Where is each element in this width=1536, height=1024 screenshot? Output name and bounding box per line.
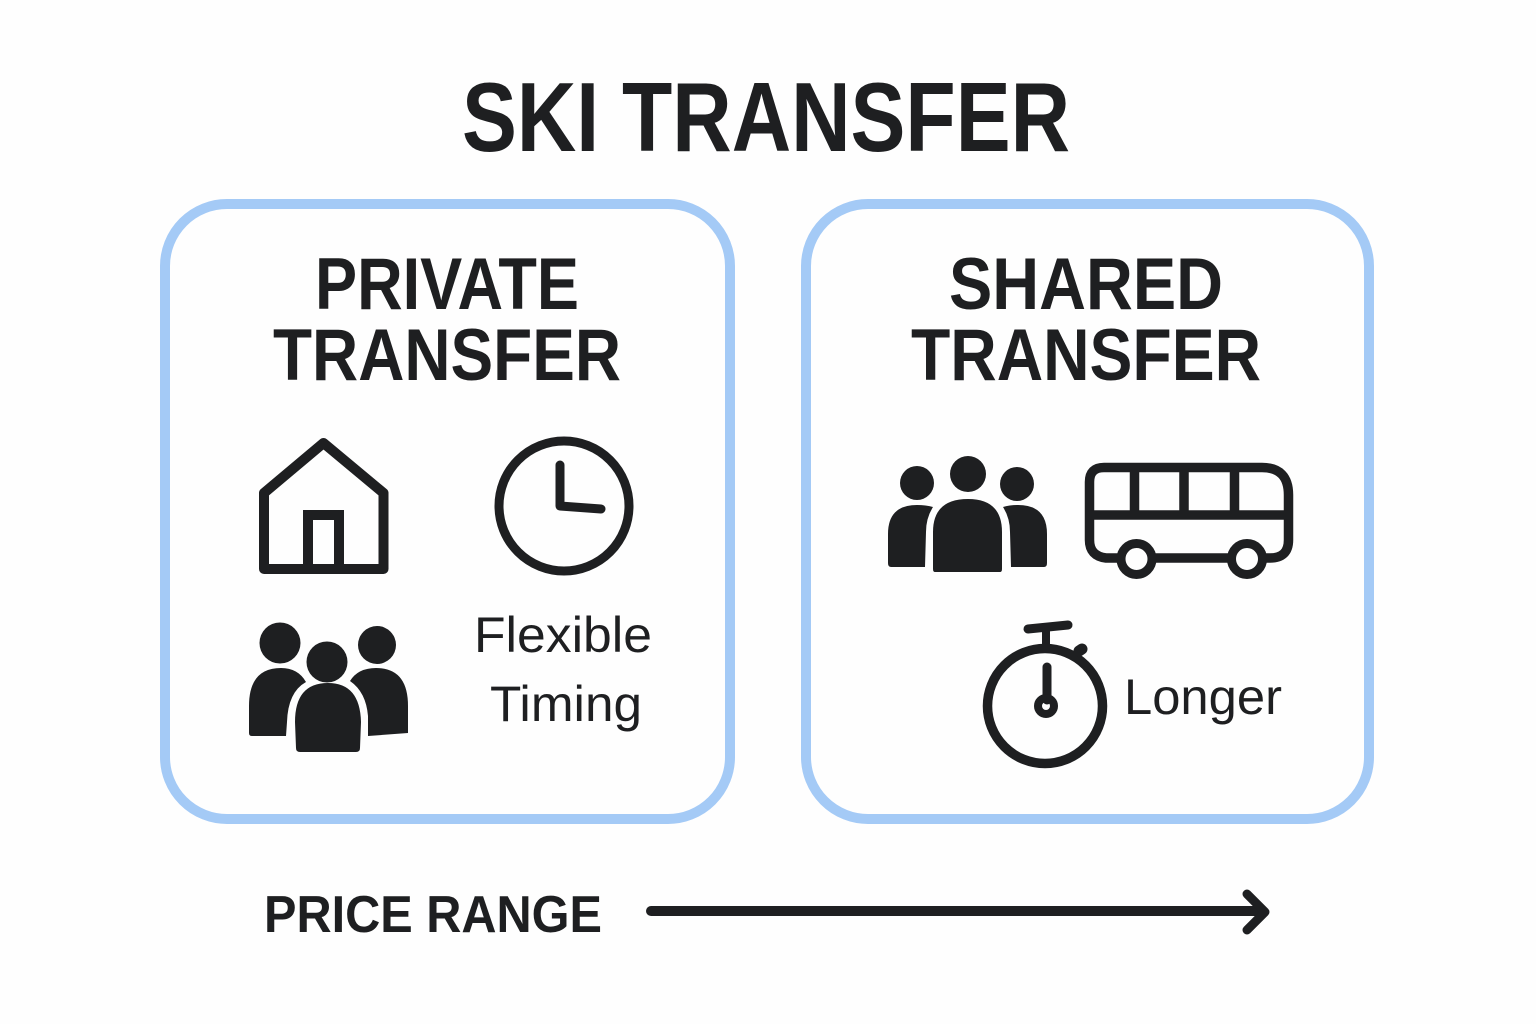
panel: private transfer [165, 204, 730, 819]
heading: private transfer: TRANSFER [273, 315, 621, 396]
label: flexible timing: Timing [490, 676, 642, 732]
icon: house [264, 443, 384, 569]
icon: bus [1090, 468, 1288, 574]
icon: group of people [249, 622, 408, 752]
panel: shared transfer [806, 204, 1369, 819]
arrow: price range [651, 894, 1265, 930]
heading: private transfer [273, 244, 621, 396]
label: flexible timing [474, 607, 652, 732]
heading: shared transfer: TRANSFER [911, 315, 1261, 396]
icon: clock [499, 441, 629, 571]
label: flexible timing: Flexible [474, 607, 652, 663]
title: SKI TRANSFER [462, 62, 1070, 172]
label: price range: PRICE RANGE [264, 886, 602, 944]
heading: shared transfer: SHARED [949, 244, 1223, 325]
icon: stopwatch [988, 625, 1102, 764]
heading: shared transfer [911, 244, 1261, 396]
heading: private transfer: PRIVATE [315, 244, 579, 325]
label: longer: Longer [1124, 669, 1282, 725]
icon: group of people [888, 456, 1047, 572]
